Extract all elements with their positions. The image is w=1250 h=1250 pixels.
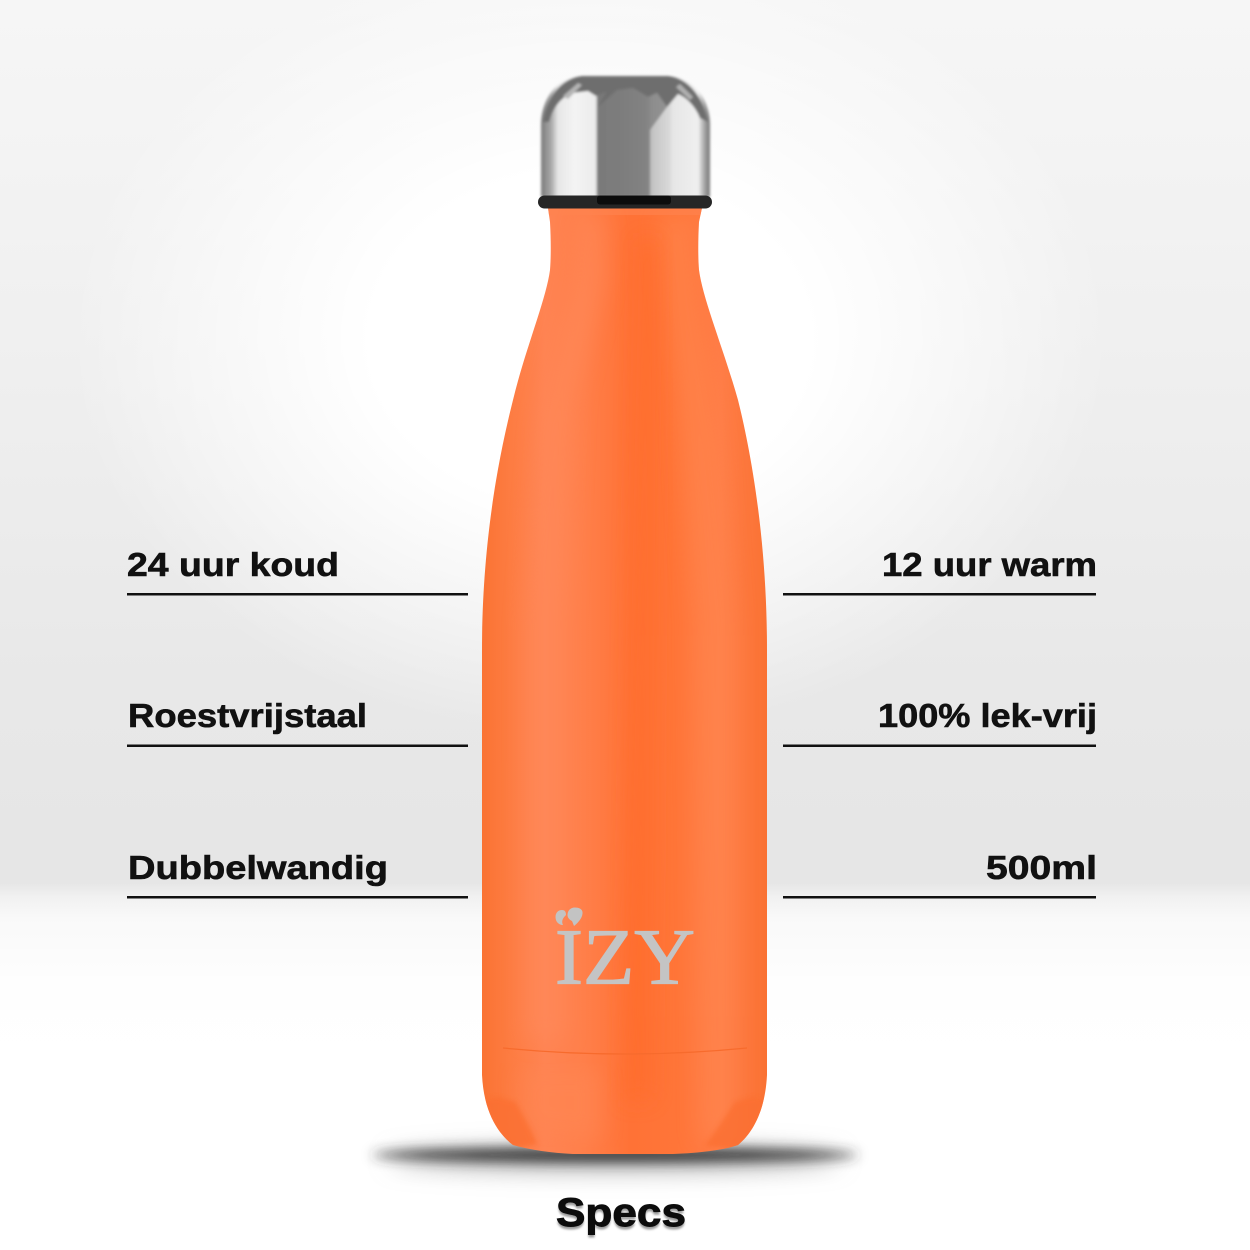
spec: 500ml: 500ml — [986, 849, 1097, 886]
spec: Dubbelwandig: Dubbelwandig — [128, 849, 388, 886]
spec: 12 uur warm: 12 uur warm — [882, 546, 1097, 583]
bottle base detail — [503, 1048, 747, 1054]
heading: Specs: Specs — [556, 1194, 686, 1238]
IZY logo — [555, 908, 695, 1002]
spec: 100% lek-vrij: 100% lek-vrij — [878, 697, 1097, 734]
stainless steel cap — [541, 76, 710, 197]
bottle shading — [482, 208, 767, 1150]
bottle body — [482, 208, 767, 1154]
heading: Specs: Specs — [556, 1191, 686, 1235]
spec: 24 uur koud: 24 uur koud — [127, 546, 339, 583]
logo wordmark: IZY — [555, 914, 695, 1002]
logo dots — [556, 908, 583, 926]
bottle — [482, 76, 767, 1154]
floor shadow — [372, 1148, 858, 1170]
cap ring — [538, 196, 712, 208]
spec: Roestvrijstaal: Roestvrijstaal — [128, 697, 367, 734]
